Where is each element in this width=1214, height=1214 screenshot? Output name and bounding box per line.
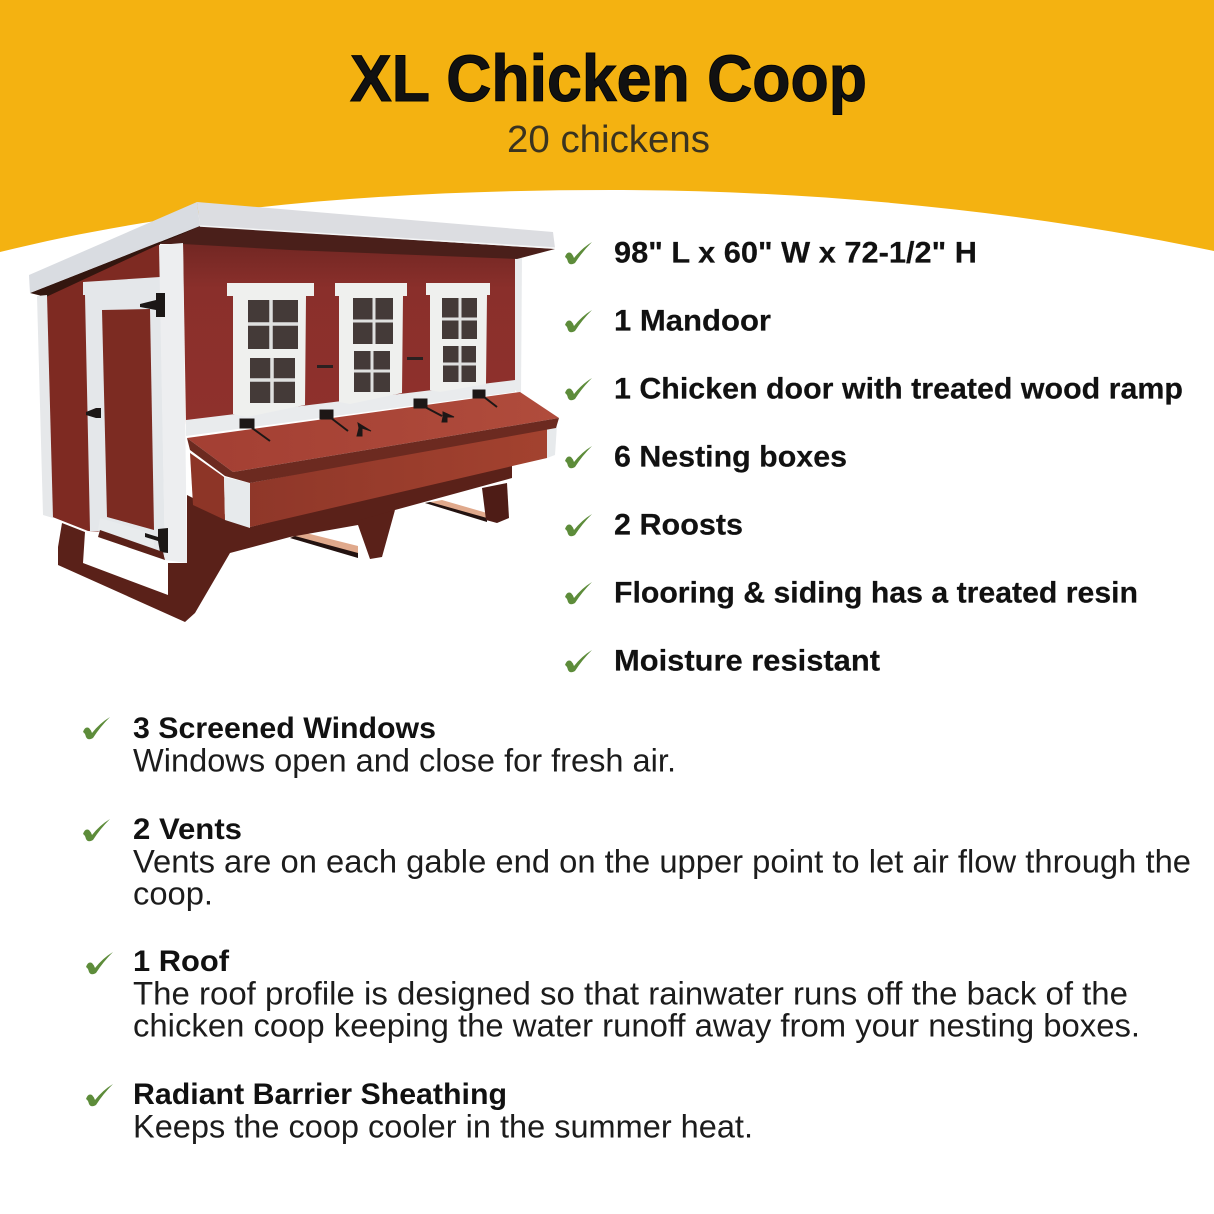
door frame <box>83 277 165 556</box>
right wall trim <box>513 258 522 396</box>
description continued: coop. <box>133 876 213 912</box>
white door threshold <box>98 518 154 548</box>
icon: check <box>86 1084 113 1106</box>
heading: Radiant Barrier Sheathing <box>133 1078 507 1111</box>
feature: mandoor: 1 Mandoor <box>614 304 771 338</box>
lid hinges and handles <box>240 390 497 441</box>
subtitle: 20 chickens <box>507 119 710 161</box>
icon: check <box>565 514 592 536</box>
feature: moisture resistant: Moisture resistant <box>614 644 880 678</box>
description: The roof profile is designed so that rainwater runs off the back of the <box>133 976 1128 1012</box>
board under door <box>98 530 165 560</box>
window 3 <box>426 283 490 392</box>
left corner trim <box>37 295 53 518</box>
rear skid boards <box>290 500 487 558</box>
icon: check <box>83 819 110 841</box>
section: 2 vents <box>83 813 1191 912</box>
left eave <box>30 226 200 297</box>
icon: check <box>565 310 592 332</box>
center leg <box>353 510 395 559</box>
section: 1 roof <box>86 945 1140 1044</box>
front eave <box>160 226 555 259</box>
icon: check <box>86 952 113 974</box>
nesting box front <box>250 427 547 527</box>
illustration: chicken coop <box>29 202 559 622</box>
roof <box>29 202 555 293</box>
title: XL Chicken Coop <box>350 41 867 115</box>
icon: check <box>565 650 592 672</box>
section: 3 screened windows <box>83 712 676 778</box>
icon: check <box>565 242 592 264</box>
description: Keeps the coop cooler in the summer heat. <box>133 1108 753 1144</box>
description continued: chicken coop keeping the water runoff away from your nesting boxes. <box>133 1008 1140 1044</box>
window latches <box>317 357 423 368</box>
door hinges and latch <box>86 293 168 553</box>
window 2 <box>335 283 407 404</box>
feature list: top right <box>565 236 1183 678</box>
feature: roosts: 2 Roosts <box>614 508 743 542</box>
heading: 2 Vents <box>133 813 242 846</box>
front corner post <box>159 243 187 563</box>
yellow header banner <box>0 0 1214 252</box>
icon: check <box>565 582 592 604</box>
door panel <box>102 309 154 530</box>
window 1 <box>227 283 314 417</box>
section: radiant barrier sheathing <box>86 1078 753 1144</box>
coop side wall <box>40 240 160 535</box>
nesting box side <box>190 453 225 520</box>
under-frame and base <box>58 462 512 622</box>
feature: flooring: Flooring & siding has a treated resin <box>614 576 1138 610</box>
icon: check <box>83 717 110 739</box>
feature: nesting boxes: 6 Nesting boxes <box>614 440 847 474</box>
heading: 1 Roof <box>133 945 230 978</box>
feature: chicken door: 1 Chicken door with treated wood ramp <box>614 372 1183 406</box>
icon: check <box>565 378 592 400</box>
front wall <box>183 243 515 425</box>
icon: check <box>565 446 592 468</box>
description: Vents are on each gable end on the upper point to let air flow through the <box>133 844 1191 880</box>
right leg <box>482 483 509 523</box>
nesting box lid <box>187 392 559 483</box>
white sill band <box>186 380 515 436</box>
heading: 3 Screened Windows <box>133 712 436 745</box>
description: Windows open and close for fresh air. <box>133 742 676 778</box>
nesting box white corner trims <box>224 425 557 528</box>
feature: dimensions: 98" L x 60" W x 72-1/2" H <box>614 236 977 270</box>
